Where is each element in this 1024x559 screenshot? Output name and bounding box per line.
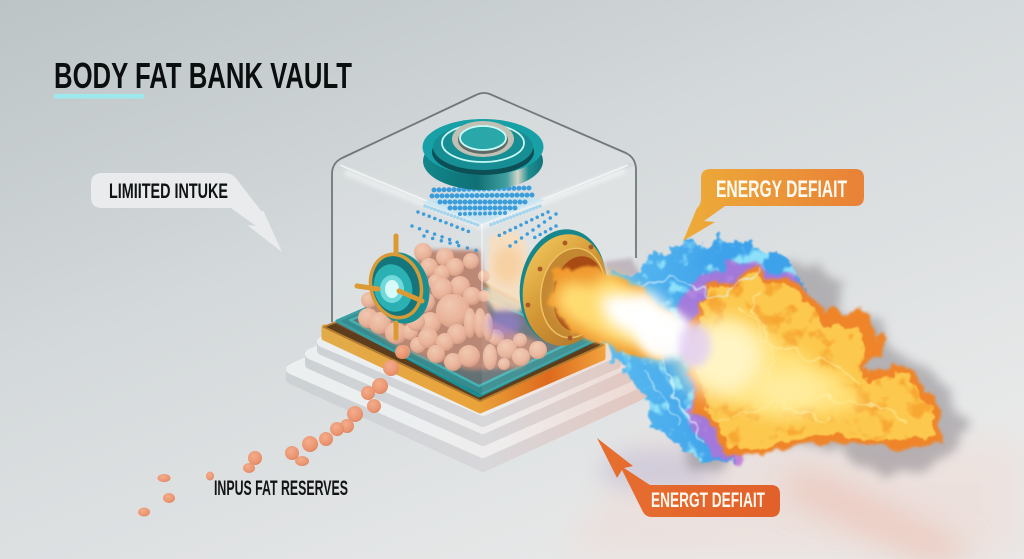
stepped pedestal — [291, 282, 650, 467]
reflected flame glow inside glass — [487, 231, 527, 312]
vault wheel with handles — [357, 236, 437, 338]
title underline — [54, 94, 144, 98]
callout: limited intake — [91, 173, 282, 252]
flame blue plasma — [600, 238, 805, 462]
glass reflections — [345, 170, 625, 226]
wheel handles — [357, 236, 422, 338]
blue particle stream — [412, 186, 556, 252]
gold and teal vault base — [324, 270, 603, 411]
fat cell cluster — [358, 243, 547, 371]
flame smoke halo — [690, 258, 968, 470]
callout: limited intake: LIMIITED INTUKE — [109, 180, 228, 203]
gold porthole flange — [512, 224, 614, 351]
flame golden core — [694, 274, 934, 450]
flame orange body — [688, 268, 947, 458]
glass faces — [332, 165, 482, 395]
label: fat reserves: INPUS FAT RESERVES — [214, 477, 348, 500]
flame texture veins — [720, 292, 905, 425]
glass outlines — [332, 93, 636, 322]
teal plate — [337, 272, 594, 396]
flame purple fringe — [678, 262, 815, 464]
callout: energy deficit bottom: ENERGT DEFIAIT — [651, 489, 765, 512]
flame jet — [550, 238, 968, 470]
teal top disc — [422, 119, 544, 190]
callout: energy deficit bottom — [597, 438, 780, 517]
flame nozzle stream — [550, 268, 675, 360]
glass cube — [332, 92, 636, 395]
title — [54, 55, 352, 98]
callout: energy deficit top — [683, 169, 864, 241]
callout: energy deficit top: ENERGY DEFIAIT — [716, 176, 847, 203]
title: BODY FAT BANK VAULT — [54, 55, 352, 96]
escaping fat pills — [138, 345, 409, 516]
